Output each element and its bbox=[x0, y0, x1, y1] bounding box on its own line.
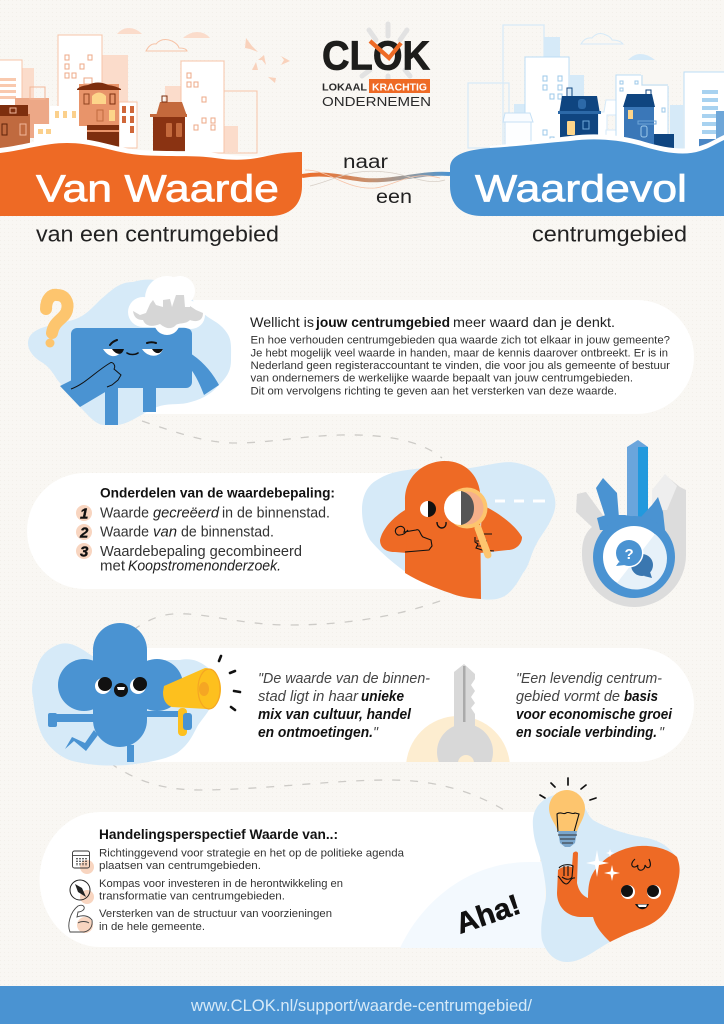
connector word: naar: naar bbox=[343, 152, 389, 173]
clouds and birds left bbox=[117, 28, 290, 83]
ribbon connecting the banners bbox=[302, 170, 450, 188]
megaphone sound rays bbox=[219, 656, 240, 710]
item: richtinggevend: plaatsen van centrumgebieden. bbox=[99, 860, 261, 872]
subtitle: van een centrumgebied: van een centrumgebied bbox=[36, 222, 279, 246]
item: kompas: Kompas voor investeren in de herontwikkeling en bbox=[99, 878, 343, 890]
thought cloud with city bbox=[128, 276, 205, 335]
sparkles bbox=[586, 849, 620, 881]
hands bbox=[395, 526, 494, 552]
text block: introduction body: Je hebt mogelijk veel waarde in handen, maar de kennis daarover ontbreekt. Er is in bbox=[250, 348, 668, 360]
hand lines and hair bbox=[558, 859, 650, 884]
face bbox=[420, 501, 446, 528]
quote: levendig centrumgebied: en sociale verbinding. bbox=[516, 725, 657, 741]
logo: CLOK Lokaal Krachtig Ondernemen: KRACHTIG bbox=[372, 81, 427, 93]
quote: waarde van de binnenstad: unieke bbox=[361, 689, 404, 705]
list item 2: de binnenstad. bbox=[181, 525, 274, 541]
face bbox=[621, 885, 661, 909]
icon: light bulb bbox=[540, 778, 596, 847]
subtitle: centrumgebied: centrumgebied bbox=[532, 222, 687, 246]
quote: waarde van de binnenstad bbox=[258, 671, 430, 741]
heading: onderdelen: Onderdelen van de waardebepaling: bbox=[100, 486, 335, 501]
clouds right bbox=[581, 34, 655, 60]
quote: waarde van de binnenstad: " bbox=[373, 725, 379, 741]
list item 1: in de binnenstad. bbox=[222, 506, 330, 522]
list item 1: Waarde bbox=[100, 506, 149, 522]
icon: chat bubbles: ? bbox=[624, 546, 634, 563]
list item 3: met bbox=[100, 559, 125, 575]
list item 2: 2 bbox=[79, 524, 89, 542]
quote: waarde van de binnenstad: "De waarde van de binnen- bbox=[258, 671, 430, 687]
quote: levendig centrumgebied bbox=[516, 671, 673, 741]
panel: introduction bbox=[130, 300, 694, 414]
icon: chat bubbles bbox=[614, 538, 653, 578]
face bbox=[95, 677, 147, 697]
item: versterken: in de hele gemeente. bbox=[99, 921, 205, 933]
heading: introduction: Wellicht is bbox=[250, 315, 314, 330]
list item 1: 1 bbox=[80, 506, 88, 522]
connector word: een: een bbox=[376, 187, 412, 208]
item: kompas bbox=[70, 878, 343, 904]
quote: waarde van de binnenstad: en ontmoetingen. bbox=[258, 725, 373, 741]
item: richtinggevend bbox=[72, 848, 404, 874]
heading: introduction: jouw centrumgebied bbox=[315, 315, 450, 330]
item: kompas: transformatie van centrumgebieden. bbox=[99, 890, 285, 902]
banner: Van Waarde bbox=[0, 138, 302, 216]
list item 1: gecreëerd bbox=[153, 506, 220, 522]
illustration: blue clover character with megaphone bbox=[32, 623, 240, 766]
footer bar: www.CLOK.nl/support/waarde-centrumgebied/ bbox=[190, 996, 532, 1015]
quote: waarde van de binnenstad: stad ligt in haar bbox=[258, 689, 359, 705]
magnifying glass bbox=[444, 490, 488, 555]
list item 2: van bbox=[153, 525, 177, 541]
logo: CLOK Lokaal Krachtig Ondernemen: LOKAAL bbox=[322, 82, 367, 94]
blue tower and city bbox=[596, 440, 665, 530]
quote: waarde van de binnenstad: mix van cultuur, handel bbox=[258, 707, 412, 723]
illustration: orange character with magnifying glass bbox=[362, 461, 555, 600]
list item 3: Waardebepaling gecombineerd bbox=[100, 544, 302, 560]
face and pointing hand bbox=[71, 340, 163, 389]
text block: introduction body: Dit om vervolgens richting te geven aan het versterken van deze waarde. bbox=[250, 385, 617, 397]
grey shadow city bbox=[576, 475, 686, 607]
list item 1 bbox=[76, 505, 330, 522]
item: versterken: Versterken van de structuur van voorzieningen bbox=[99, 908, 332, 920]
heading: introduction bbox=[250, 315, 615, 330]
quote: levendig centrumgebied: voor economische groei bbox=[516, 707, 673, 723]
illustration: key bbox=[406, 664, 510, 762]
panel: quotes bbox=[147, 648, 694, 762]
text block: introduction body: Nederland geen registeraccountant te vinden, die voor jou als gemeente of bestuur bbox=[250, 360, 670, 372]
item: richtinggevend: Richtinggevend voor strategie en het op de politieke agenda bbox=[99, 848, 404, 860]
icon: question mark bbox=[46, 295, 68, 348]
list item 3: 3 bbox=[80, 544, 89, 560]
speech shape with Aha: Aha! bbox=[452, 889, 525, 941]
quote: levendig centrumgebied: basis bbox=[624, 689, 658, 705]
illustration: orange character with idea bbox=[533, 778, 680, 962]
text block: introduction body: En hoe verhouden centrumgebieden qua waarde zich tot elkaar in jouw gemeente? bbox=[250, 334, 670, 346]
panel: handelingsperspectief bbox=[40, 812, 540, 947]
list item 2: Waarde bbox=[100, 525, 149, 541]
banner: Van Waarde: Van Waarde bbox=[36, 168, 279, 210]
skyline: warm city left bbox=[0, 35, 257, 153]
panel: onderdelen van de waardebepaling bbox=[27, 473, 440, 589]
skyline: blue city right bbox=[468, 25, 724, 154]
logo: CLOK Lokaal Krachtig Ondernemen bbox=[322, 24, 431, 109]
illustration: city on chat badge bbox=[576, 440, 686, 607]
text block: introduction body: van ondernemers de werkelijke waarde bepaalt van jouw centrumgebieden. bbox=[250, 373, 633, 385]
logo: CLOK Lokaal Krachtig Ondernemen: CLOK bbox=[322, 32, 430, 78]
speech shape with Aha bbox=[400, 862, 545, 948]
heading: introduction: meer waard dan je denkt. bbox=[453, 315, 615, 330]
dashed route lines bbox=[110, 421, 530, 828]
heading: handelingsperspectief: Handelingsperspectief Waarde van..: bbox=[99, 827, 338, 842]
quote: levendig centrumgebied: gebied vormt de bbox=[516, 689, 620, 705]
list item 2 bbox=[76, 524, 274, 542]
list item 3: Koopstromenonderzoek. bbox=[128, 559, 281, 575]
illustration: thinking blue board character bbox=[28, 276, 231, 425]
logo: CLOK Lokaal Krachtig Ondernemen: ONDERNEMEN bbox=[322, 95, 431, 109]
banner: Waardevol bbox=[450, 134, 724, 216]
item: versterken bbox=[69, 905, 332, 933]
footer bar bbox=[0, 986, 724, 1024]
text block: introduction body bbox=[250, 334, 670, 397]
icon: megaphone bbox=[163, 668, 221, 736]
quote: levendig centrumgebied: " bbox=[659, 725, 665, 741]
list item 3 bbox=[76, 543, 302, 575]
quote: levendig centrumgebied: "Een levendig centrum- bbox=[516, 671, 662, 687]
banner: Waardevol: Waardevol bbox=[475, 168, 687, 210]
